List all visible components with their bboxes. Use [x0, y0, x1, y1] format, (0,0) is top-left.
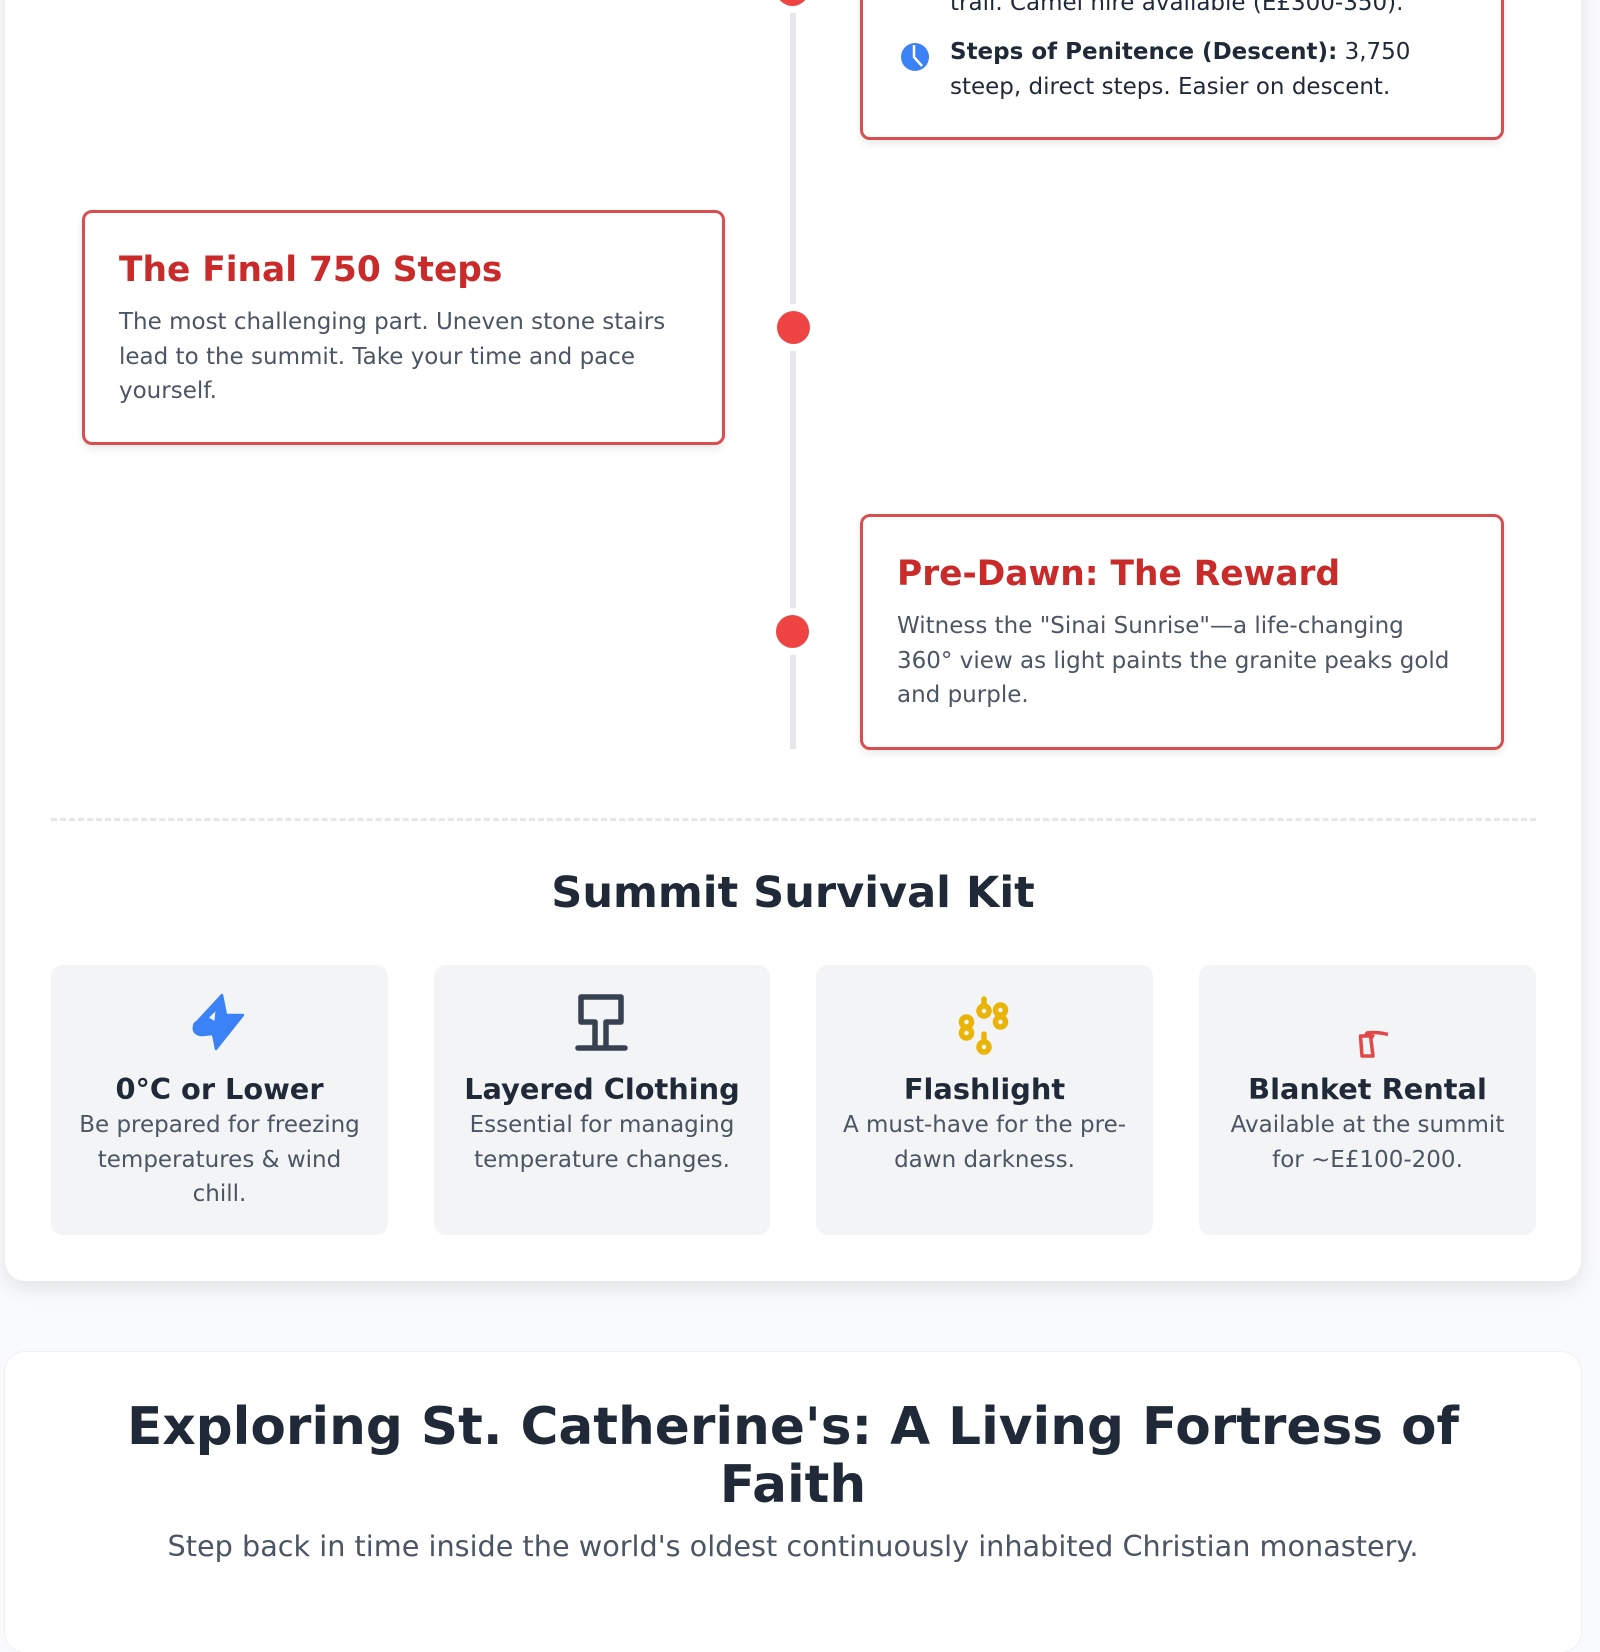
timeline dot: reward: [776, 615, 809, 648]
route text: steps of penitence: steep, direct steps. Easier on descent.: [950, 74, 1390, 100]
description: 360° view as light paints the granite peaks gold: [897, 648, 1449, 674]
panel: st catherine's section: [5, 1352, 1581, 1652]
description: yourself.: [119, 378, 217, 404]
text: [1230, 1112, 1504, 1173]
title: Layered Clothing: [464, 1072, 740, 1106]
text: chill.: [193, 1181, 246, 1207]
kit card: clothing: [434, 965, 770, 1235]
heading: summit survival kit: Summit Survival Kit: [551, 868, 1035, 918]
title: Flashlight: [904, 1072, 1065, 1106]
panel: routes box: [860, 0, 1504, 140]
kit card: temperature: [51, 965, 388, 1235]
icon: layered clothing: [575, 994, 628, 1051]
icon: clock: [901, 43, 929, 71]
kit card: blanket: [1199, 965, 1536, 1235]
text: temperature changes.: [474, 1147, 730, 1173]
description: [118, 309, 665, 404]
description: lead to the summit. Take your time and pace: [119, 344, 635, 370]
section title: Faith: [720, 1455, 866, 1515]
title: 0°C or Lower: [115, 1072, 324, 1106]
text: Essential for managing: [470, 1112, 734, 1138]
section title: Exploring St. Catherine's: A Living Fortress of: [127, 1397, 1459, 1457]
timeline line: [790, 0, 796, 749]
text: [470, 1112, 734, 1173]
description: [897, 613, 1449, 708]
route text: steps of penitence: Steps of Penitence (Descent): 3,750: [950, 39, 1410, 65]
text: dawn darkness.: [894, 1147, 1075, 1173]
text: temperatures & wind: [98, 1147, 341, 1173]
icon: blanket: [1358, 1030, 1388, 1058]
panel: pre-dawn reward: [860, 514, 1504, 750]
text: [843, 1112, 1126, 1173]
route text: steps of penitence: [950, 39, 1410, 100]
panel: the final 750 steps: [82, 210, 725, 445]
description: and purple.: [897, 682, 1029, 708]
panel: trek timeline card: [5, 0, 1581, 1281]
icon: bolt: [192, 994, 244, 1050]
text: [79, 1112, 360, 1207]
timeline dot: final steps: [777, 311, 810, 344]
description: Witness the "Sinai Sunrise"—a life-changing: [897, 613, 1404, 639]
section subtitle: Step back in time inside the world's oldest continuously inhabited Christian monastery.: [168, 1529, 1418, 1563]
text: A must-have for the pre-: [843, 1112, 1126, 1138]
section title: [127, 1397, 1460, 1515]
text: Available at the summit: [1231, 1112, 1504, 1138]
description: The most challenging part. Uneven stone stairs: [119, 309, 665, 335]
title: Blanket Rental: [1248, 1072, 1487, 1106]
dashed divider: [51, 818, 1536, 821]
kit card: flashlight: [816, 965, 1153, 1235]
icon: flashlight: [958, 996, 1008, 1055]
text: for ~E£100-200.: [1272, 1147, 1463, 1173]
timeline dot: top: [776, 0, 809, 6]
heading: The Final 750 Steps: [119, 250, 502, 290]
heading: Pre-Dawn: The Reward: [897, 554, 1340, 594]
text: Be prepared for freezing: [79, 1112, 360, 1138]
